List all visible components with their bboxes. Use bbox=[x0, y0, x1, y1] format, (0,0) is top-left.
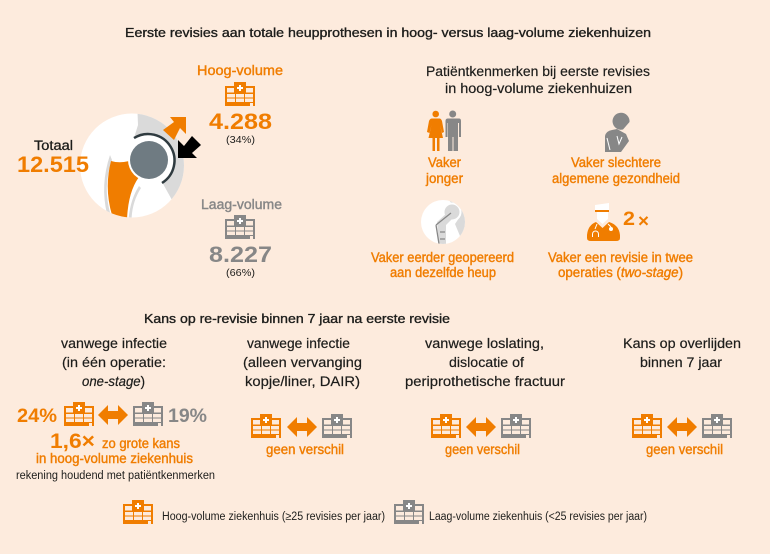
high volume summary: (34%) bbox=[226, 134, 255, 146]
high volume summary: Hoog-volume bbox=[197, 63, 283, 78]
heading: re-revision: Kans op re-revisie binnen 7 jaar na eerste revisie bbox=[144, 311, 450, 326]
column: mortality bbox=[623, 336, 741, 457]
arrow: up to high volume bbox=[163, 117, 186, 140]
high volume summary: 4.288 bbox=[209, 109, 272, 134]
column: one-stage infection: 24% bbox=[17, 406, 57, 427]
heading: patient characteristics: in hoog-volume ziekenhuizen bbox=[445, 81, 632, 96]
column: one-stage infection: 1,6× bbox=[50, 430, 95, 453]
text: two-stage revision: Vaker een revisie in twee bbox=[548, 250, 693, 265]
text: poorer general health bbox=[552, 155, 680, 186]
low volume summary: Laag-volume bbox=[201, 197, 282, 212]
text: younger: Vaker bbox=[428, 155, 461, 170]
column: loosening, dislocation, fracture: vanwege loslating, bbox=[425, 336, 544, 351]
heading: patient characteristics: Patiëntkenmerken bij eerste revisies bbox=[426, 64, 650, 79]
legend: Hoog-volume ziekenhuis (≥25 revisies per jaar) bbox=[162, 511, 385, 523]
text: previously operated: Vaker eerder geopereerd bbox=[371, 250, 514, 265]
text: two-stage revision: operaties (two-stage) bbox=[558, 265, 683, 280]
column: mortality: binnen 7 jaar bbox=[640, 355, 723, 370]
heading: patient characteristics bbox=[426, 64, 650, 96]
text: two-stage revision bbox=[548, 250, 693, 280]
text: poorer general health: algemene gezondheid bbox=[552, 171, 680, 186]
total count bbox=[17, 138, 89, 177]
text: younger: jonger bbox=[425, 171, 463, 186]
two times label: 2 bbox=[623, 209, 635, 230]
column: one-stage infection: one-stage) bbox=[82, 374, 145, 389]
text: younger bbox=[425, 155, 463, 186]
icon: previously operated hip bbox=[421, 200, 465, 244]
column: mortality: geen verschil bbox=[646, 442, 723, 457]
column: infection DAIR: (alleen vervanging bbox=[243, 355, 362, 370]
low volume summary: 8.227 bbox=[209, 242, 272, 267]
text: previously operated: aan dezelfde heup bbox=[390, 265, 496, 280]
arrow: down to low volume bbox=[178, 136, 201, 158]
legend bbox=[123, 500, 647, 524]
column: infection DAIR: geen verschil bbox=[266, 442, 344, 457]
title: Eerste revisies aan totale heupprothesen in hoog- versus laag-volume ziekenhuizen bbox=[125, 25, 651, 40]
column: one-stage infection: (in één operatie: bbox=[62, 355, 166, 370]
column: one-stage infection: rekening houdend met patiëntkenmerken bbox=[16, 470, 215, 482]
column: loosening, dislocation, fracture: geen verschil bbox=[445, 442, 520, 457]
column: loosening, dislocation, fracture: periprothetische fractuur bbox=[405, 374, 566, 389]
total count: Totaal bbox=[34, 138, 73, 153]
column: one-stage infection bbox=[16, 336, 215, 482]
icon: surgeon bbox=[587, 203, 620, 241]
hip joint illustration bbox=[80, 112, 190, 220]
low volume summary: (66%) bbox=[226, 267, 255, 279]
column: one-stage infection: zo grote kans bbox=[102, 436, 180, 451]
column: loosening, dislocation, fracture: dislocatie of bbox=[449, 355, 524, 370]
text: poorer general health: Vaker slechtere bbox=[571, 155, 661, 170]
column: infection DAIR: kopje/liner, DAIR) bbox=[245, 374, 360, 389]
icon: woman and man bbox=[427, 110, 461, 151]
two times label bbox=[623, 209, 649, 231]
column: infection DAIR bbox=[243, 336, 362, 457]
column: one-stage infection: 19% bbox=[168, 406, 207, 427]
column: one-stage infection: vanwege infectie bbox=[61, 336, 167, 351]
high volume summary bbox=[197, 63, 283, 146]
total count: 12.515 bbox=[17, 152, 89, 177]
column: mortality: Kans op overlijden bbox=[623, 336, 741, 351]
low volume summary bbox=[201, 197, 282, 279]
column: loosening, dislocation, fracture bbox=[405, 336, 566, 457]
icon: person with poor health bbox=[605, 113, 630, 152]
text: previously operated bbox=[371, 250, 514, 280]
two times label: × bbox=[638, 211, 649, 231]
legend: Laag-volume ziekenhuis (<25 revisies per jaar) bbox=[429, 511, 647, 523]
column: one-stage infection: in hoog-volume ziekenhuis bbox=[36, 451, 193, 466]
column: infection DAIR: vanwege infectie bbox=[247, 336, 350, 351]
